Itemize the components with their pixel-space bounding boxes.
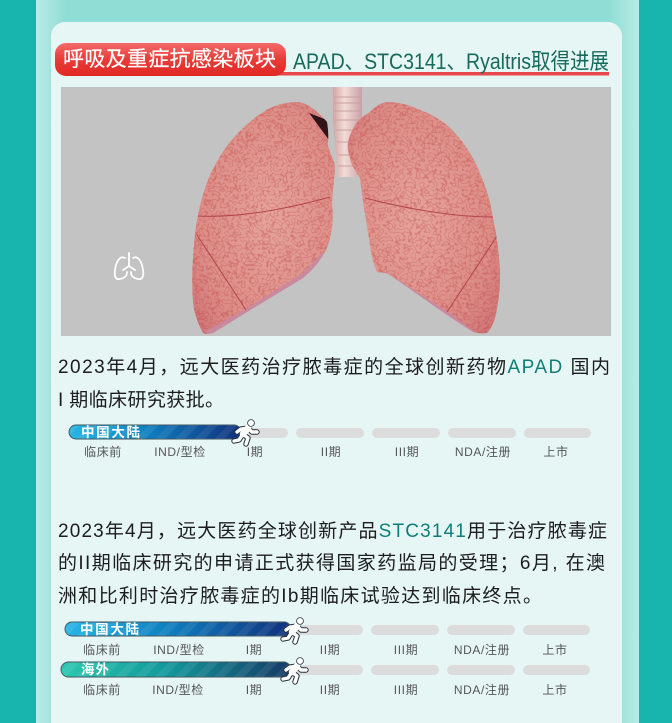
stage labels: NDA/注册 (455, 444, 511, 459)
stage labels: 临床前 (84, 444, 122, 459)
stage labels (83, 642, 568, 657)
stage labels: IND/型检 (153, 642, 205, 657)
text block: APAD: I 期临床研究获批。 (58, 389, 224, 411)
text block: APAD: 2023年4月，远大医药治疗脓毒症的全球创新药物APAD 国内 (58, 356, 610, 378)
progress bar (65, 621, 291, 637)
progress bar: 海外 (81, 661, 110, 677)
stage labels (83, 682, 568, 697)
stage labels: II期 (320, 643, 340, 657)
stage labels: 上市 (543, 444, 569, 459)
heading pill: 呼吸及重症抗感染板块 (63, 48, 276, 71)
stage pills (220, 428, 591, 438)
stage labels: 上市 (542, 682, 568, 697)
heading: section banner (55, 43, 609, 76)
progress bar (69, 424, 241, 440)
progress track: STC3141 overseas (61, 658, 590, 697)
stage labels: I期 (246, 683, 262, 697)
icon: runner (283, 658, 306, 682)
stage labels: I期 (247, 445, 263, 459)
icon: runner (283, 618, 306, 642)
stage labels (84, 444, 569, 459)
trachea (333, 87, 362, 177)
text block: STC3141 (58, 520, 607, 607)
left lung (192, 102, 335, 334)
stage labels: IND/型检 (154, 444, 206, 459)
stage pills (295, 625, 590, 635)
stage labels: III期 (395, 445, 419, 459)
text block: STC3141: 2023年4月，远大医药全球创新产品STC3141用于治疗脓毒症 (58, 520, 607, 542)
text block: STC3141: 洲和比利时治疗脓毒症的Ib期临床试验达到临床终点。 (58, 585, 542, 607)
icon: runner (234, 420, 257, 444)
progress track: STC3141 China (65, 618, 590, 657)
stage labels: I期 (246, 643, 262, 657)
stage labels: II期 (320, 683, 340, 697)
progress track: APAD China (69, 420, 591, 459)
stage labels: 上市 (542, 642, 568, 657)
progress bar: 中国大陆 (80, 621, 140, 637)
stage labels: NDA/注册 (454, 682, 510, 697)
heading subtitle: APAD、STC3141、Ryaltris取得进展 (293, 49, 609, 74)
stage labels: IND/型检 (152, 682, 204, 697)
stage labels: II期 (321, 445, 341, 459)
stage labels: III期 (394, 683, 418, 697)
text block: STC3141: 的II期临床研究的申请正式获得国家药监局的受理；6月, 在澳 (58, 552, 605, 574)
stage labels: NDA/注册 (454, 642, 510, 657)
stage pills (295, 665, 590, 675)
progress bar (61, 661, 291, 677)
icon: lungs outline (115, 253, 143, 279)
stage labels: III期 (394, 643, 418, 657)
stage labels: 临床前 (83, 682, 121, 697)
text block: APAD (58, 356, 610, 411)
stage labels: 临床前 (83, 642, 121, 657)
image: lungs (61, 87, 611, 340)
right lung (345, 95, 505, 340)
heading pill (55, 43, 286, 76)
progress bar: 中国大陆 (81, 424, 140, 440)
